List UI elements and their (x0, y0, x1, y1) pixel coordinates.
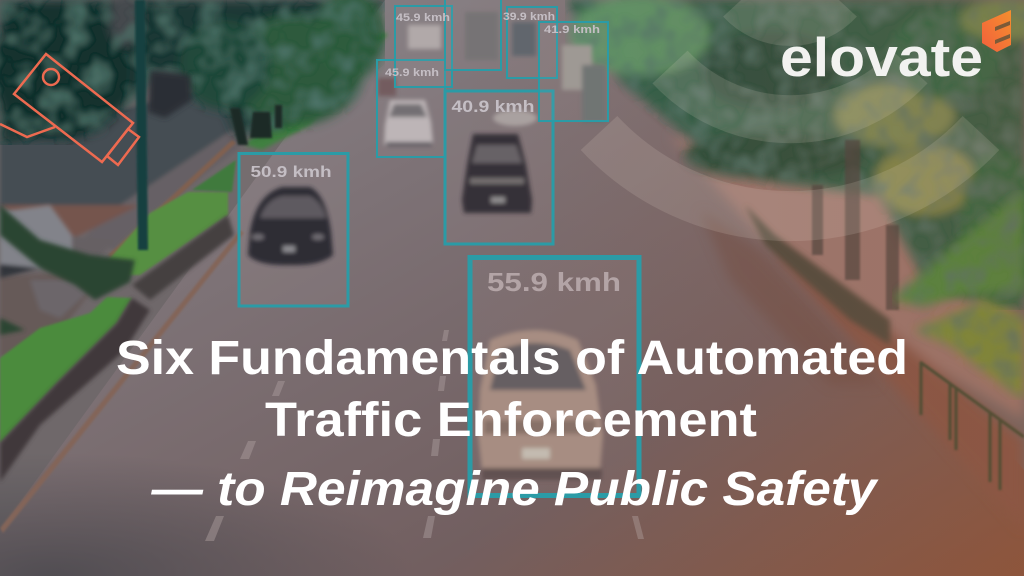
median shadow lower (0, 298, 150, 482)
label 39.9: 39.9 kmh (503, 11, 555, 23)
left side street (0, 85, 240, 358)
right trees (565, 0, 1024, 310)
dark cars behind trees (148, 70, 192, 118)
kerb shadow on road (700, 210, 880, 385)
car: black sedan (248, 187, 333, 265)
dark lower-left road shading (0, 400, 520, 576)
icon: surveillance camera (0, 54, 139, 165)
light pole (135, 0, 148, 250)
logo mark: orange E (982, 10, 1011, 52)
title line 1: Six Fundamentals of Automated (116, 332, 908, 385)
orange kerb upper (108, 140, 236, 258)
label 45.9 upper: 45.9 kmh (396, 12, 450, 24)
right tree trunks (812, 140, 899, 310)
title line 3: subtitle: — to Reimagine Public Safety (150, 463, 879, 516)
foliage bottom right (892, 190, 1024, 400)
left dark trees (0, 0, 385, 145)
vehicles (248, 12, 606, 480)
label 55.9: 55.9 kmh (487, 267, 621, 297)
right dark hedge strip (745, 205, 890, 345)
car: tan foreground (478, 330, 603, 480)
green median lower (0, 297, 132, 443)
signal arcs (599, 1, 981, 216)
foreground tree branch left (0, 205, 135, 335)
parked car at left (0, 205, 72, 278)
detection boxes (239, 0, 639, 496)
label 40.9: 40.9 kmh (452, 97, 534, 116)
road left kerb line (0, 230, 244, 533)
logo: elovate (780, 10, 1011, 88)
tree trunks left (230, 105, 282, 145)
median shadow upper (132, 215, 234, 300)
lane dashes (205, 330, 644, 541)
title (116, 332, 908, 516)
label 45.9 lower: 45.9 kmh (385, 67, 439, 79)
label 50.9: 50.9 kmh (250, 164, 332, 181)
title line 2: Traffic Enforcement (265, 394, 757, 447)
green median upper (95, 192, 228, 275)
logo wordmark: elovate (780, 26, 983, 88)
right sidewalk and pink backdrop (670, 135, 1024, 530)
car: silver sedan (384, 100, 433, 146)
distant cars (378, 12, 606, 126)
right fence (920, 362, 1024, 490)
roadside bushes (245, 30, 388, 150)
speed labels (250, 11, 621, 297)
label 41.9: 41.9 kmh (544, 24, 600, 36)
car: dark SUV (462, 134, 532, 213)
